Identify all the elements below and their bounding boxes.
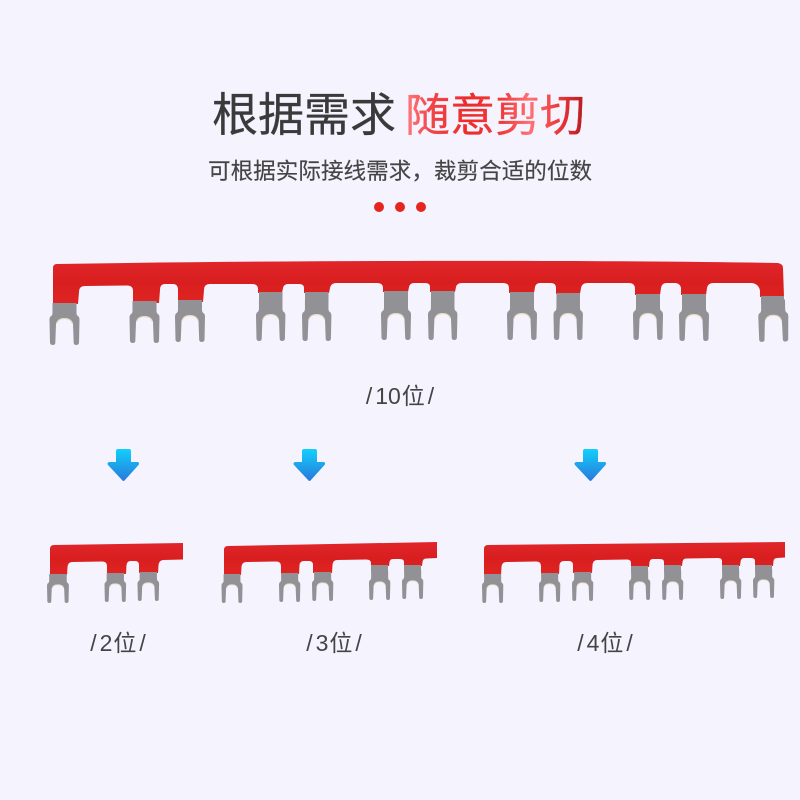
three red dots xyxy=(374,202,426,212)
arrow: down to 2 positions xyxy=(107,449,139,481)
label: 3 positions: /3位/ xyxy=(306,630,362,656)
product: 2-position cut bar xyxy=(47,543,183,603)
product: 3-position cut bar xyxy=(222,542,437,603)
arrow: down to 4 positions xyxy=(574,449,606,481)
title: 随意剪切 xyxy=(405,90,585,141)
title xyxy=(212,89,585,141)
product: 4-position cut bar xyxy=(482,542,785,603)
product: 10-position jumper bar xyxy=(50,261,789,345)
title: 根据需求 xyxy=(212,89,396,141)
label: 4 positions: /4位/ xyxy=(577,630,633,656)
subtitle: 可根据实际接线需求，裁剪合适的位数 xyxy=(208,159,592,184)
label: 2 positions: /2位/ xyxy=(90,630,146,656)
label: 10 positions: /10位/ xyxy=(366,383,435,409)
arrow: down to 3 positions xyxy=(293,449,325,481)
